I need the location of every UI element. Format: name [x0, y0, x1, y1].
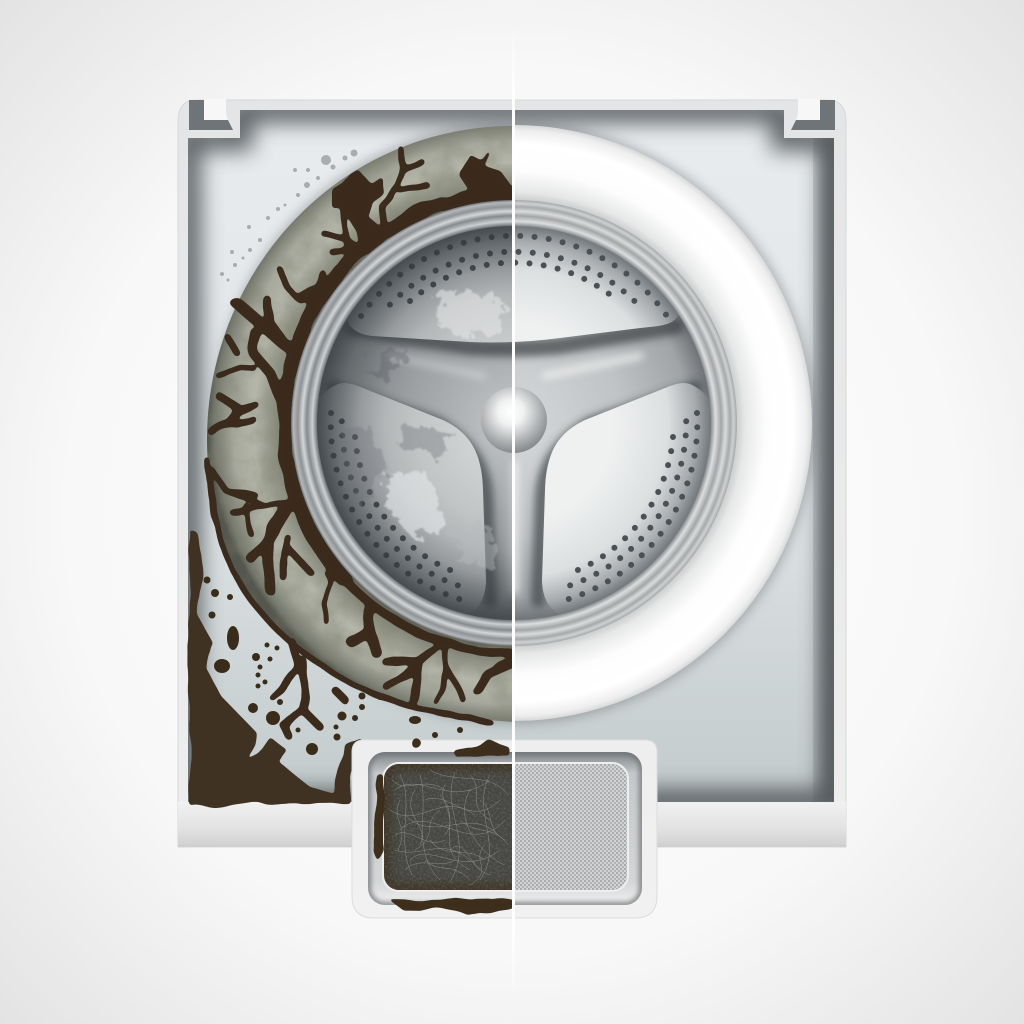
filter screen [384, 764, 627, 890]
sludge around filter [372, 737, 512, 917]
upper mould blobs [333, 170, 383, 247]
dirty half dark overlay [317, 226, 512, 620]
gasket mottling [208, 135, 512, 710]
cabinet [178, 99, 852, 847]
gasket body [207, 126, 514, 722]
lower mould branches [233, 503, 287, 533]
lint texture [384, 764, 513, 890]
overspray specks [220, 150, 358, 282]
gasket clean right half [515, 125, 812, 721]
lower left lobe [316, 383, 486, 616]
top lobe [347, 223, 680, 342]
lower right lobe [542, 383, 712, 616]
spoke highlights [390, 356, 640, 590]
sludge on lower left wall [189, 530, 463, 805]
drum perforated lobes and spokes [300, 220, 712, 630]
grey stains [340, 292, 505, 565]
drum hub [481, 387, 547, 453]
sludge mass [189, 530, 362, 805]
left mounting notch [189, 99, 233, 130]
cabinet base bar [178, 802, 846, 847]
drum rim left [291, 200, 512, 646]
right mounting notch [791, 99, 835, 130]
lint clog [384, 764, 513, 890]
drum metal base [314, 223, 714, 623]
spoke shadows [333, 326, 695, 600]
lint brown border [386, 766, 531, 888]
centre divider line [512, 20, 515, 1005]
gasket outer crust [207, 460, 490, 722]
mould band along rim [284, 193, 514, 580]
sludge drops [204, 576, 463, 755]
upper mould branches [383, 148, 427, 232]
lint filter [352, 737, 657, 918]
perforation dots [331, 236, 697, 601]
mould branches [207, 148, 514, 722]
drum [300, 213, 724, 633]
lint fibres [390, 770, 508, 885]
filter housing [352, 740, 657, 918]
filter screen surround [383, 763, 628, 891]
cabinet back wall [188, 110, 834, 802]
filter tray edge shadow [368, 752, 642, 905]
clean mesh [513, 764, 627, 890]
filter tray [368, 752, 642, 905]
sludge branches [273, 643, 345, 735]
drum rim right [515, 200, 737, 646]
back wall inner shadow [188, 100, 852, 812]
cabinet outer frame [178, 100, 846, 847]
gasket dirty left half [200, 110, 520, 735]
